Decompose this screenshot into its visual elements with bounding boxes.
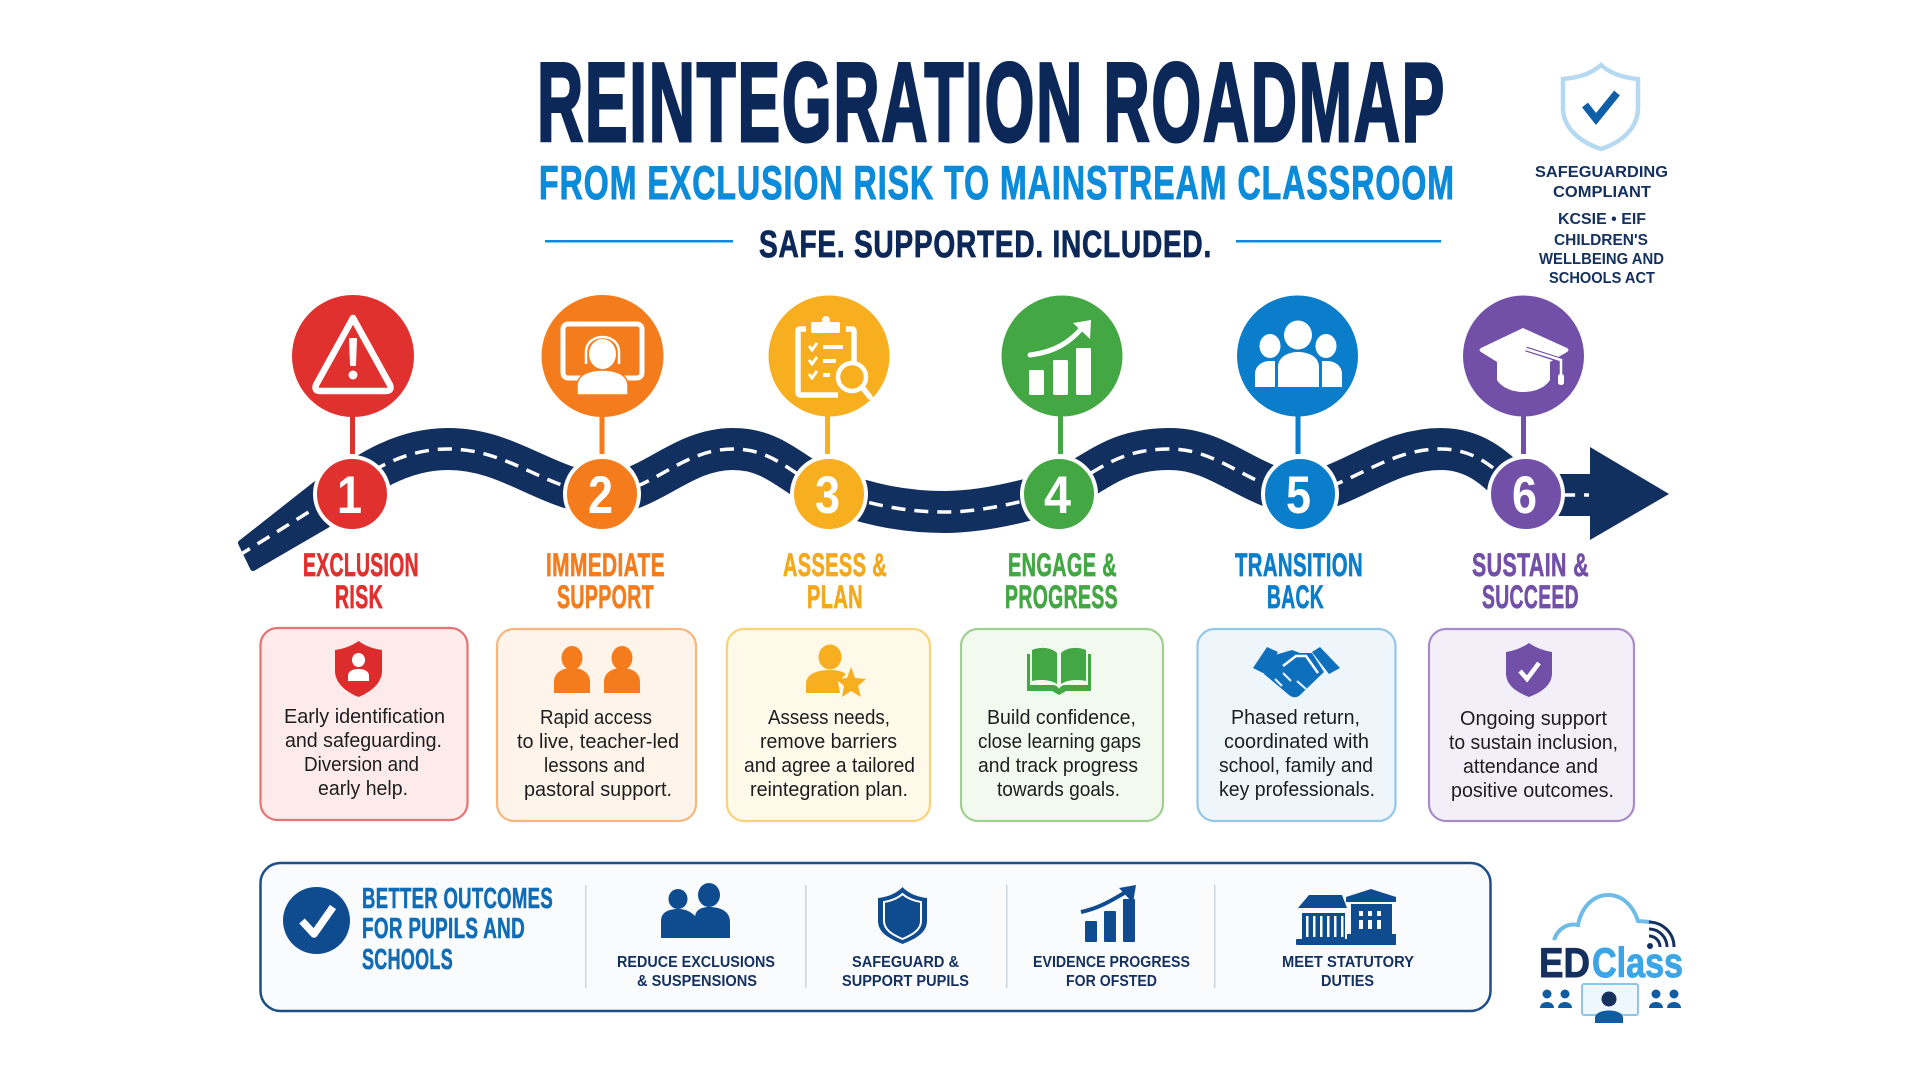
benefit: evidence progress	[1033, 885, 1190, 990]
number 6: 6	[1512, 466, 1537, 525]
card text: pastoral support.	[524, 778, 672, 801]
card text	[517, 706, 679, 801]
card text: Ongoing support	[1460, 707, 1607, 730]
heading: better outcomes	[362, 883, 553, 976]
icon: rising bar chart	[1002, 296, 1122, 416]
card box	[961, 629, 1163, 821]
card text: reintegration plan.	[750, 778, 908, 801]
panel: card 2 rapid access	[497, 629, 696, 821]
safeguarding compliant badge	[1535, 65, 1668, 287]
benefit label: FOR OFSTED	[1066, 973, 1157, 990]
icon: shield check	[1563, 65, 1638, 149]
card text: and safeguarding.	[285, 729, 442, 752]
card text: to sustain inclusion,	[1449, 731, 1618, 754]
step label: PROGRESS	[1005, 579, 1118, 615]
badge text: KCSIE • EIF	[1558, 211, 1646, 228]
benefit label: & SUSPENSIONS	[637, 973, 757, 990]
step 1: exclusion risk	[292, 295, 419, 615]
card text: key professionals.	[1219, 778, 1375, 801]
panel: card 1 early identification	[260, 628, 468, 820]
number 4	[1022, 457, 1096, 531]
heading: better outcomes: BETTER OUTCOMES	[362, 883, 553, 915]
card text: early help.	[318, 777, 408, 800]
panel: card 6 ongoing support	[1429, 629, 1634, 821]
benefit label	[1033, 954, 1190, 990]
card text	[978, 706, 1141, 801]
card box	[497, 629, 696, 821]
stem	[1521, 416, 1526, 454]
icon: progress chart	[1081, 885, 1136, 942]
card text	[744, 706, 915, 801]
step label	[546, 547, 665, 615]
icon: check circle	[283, 887, 350, 954]
benefit label: DUTIES	[1321, 973, 1374, 990]
badge text	[1535, 164, 1668, 287]
icon: institution buildings	[1296, 889, 1396, 945]
step label: BACK	[1267, 579, 1324, 615]
icon: open book	[1027, 648, 1091, 695]
card text: towards goals.	[997, 778, 1120, 801]
panel: card 3 assess needs	[727, 629, 930, 821]
number 2	[565, 457, 639, 531]
card text: and agree a tailored	[744, 754, 915, 777]
tagline with rules: SAFE. SUPPORTED. INCLUDED.	[759, 224, 1212, 266]
step label: PLAN	[807, 579, 863, 615]
stem	[350, 416, 355, 454]
card text: close learning gaps	[978, 730, 1141, 753]
step 3: assess and plan	[768, 296, 890, 615]
card text	[284, 705, 445, 800]
icon: pupils	[661, 883, 730, 938]
number 2: 2	[588, 466, 613, 525]
icon: clipboard and magnifier	[768, 296, 890, 416]
step 2: immediate support	[542, 295, 665, 615]
icon: warning triangle	[292, 295, 414, 417]
step label	[1235, 547, 1363, 615]
number 5: 5	[1286, 466, 1311, 525]
stem	[600, 416, 604, 454]
number 1: 1	[337, 466, 362, 525]
icon: person with star	[806, 644, 866, 697]
benefit label: SUPPORT PUPILS	[842, 973, 969, 990]
step label: TRANSITION	[1235, 547, 1363, 583]
step 4: engage and progress	[1002, 296, 1122, 615]
stem	[825, 416, 830, 454]
card text	[1449, 707, 1618, 802]
panel: card 5 phased return	[1198, 629, 1396, 821]
benefit label: SAFEGUARD &	[852, 954, 959, 971]
card text: Diversion and	[304, 753, 419, 776]
benefit label: MEET STATUTORY	[1282, 954, 1414, 971]
bar background	[260, 863, 1490, 1011]
step 6: sustain and succeed	[1463, 296, 1589, 615]
number 1	[315, 457, 389, 531]
badge text: WELLBEING AND	[1539, 251, 1664, 268]
card text: Assess needs,	[768, 706, 890, 729]
step label	[783, 547, 887, 615]
icon: handshake	[1253, 647, 1340, 697]
card text: to live, teacher-led	[517, 730, 679, 753]
step label: ENGAGE &	[1008, 547, 1117, 583]
card text: Early identification	[284, 705, 445, 728]
card box	[1429, 629, 1634, 821]
badge text: CHILDREN'S	[1554, 232, 1648, 249]
card text	[1219, 706, 1375, 801]
card text: coordinated with	[1224, 730, 1369, 753]
card text: school, family and	[1219, 754, 1373, 777]
number 3	[792, 457, 866, 531]
number 5	[1263, 457, 1337, 531]
card box	[727, 629, 930, 821]
step label	[1472, 547, 1589, 615]
panel: card 4 build confidence	[961, 629, 1163, 821]
card text: Build confidence,	[987, 706, 1136, 729]
number 4: 4	[1044, 466, 1071, 525]
logo wordmark	[1539, 939, 1683, 986]
road with arrow	[238, 447, 1669, 568]
step label: ASSESS &	[783, 547, 887, 583]
icon: shield with person	[335, 641, 382, 697]
benefit: meet statutory duties	[1282, 889, 1414, 990]
icon: pupils and online teacher	[1540, 984, 1681, 1023]
card text: attendance and	[1463, 755, 1598, 778]
card text: Phased return,	[1231, 706, 1360, 729]
icon: cloud	[1554, 895, 1650, 940]
benefit: safeguard and support	[842, 887, 969, 990]
card text: Rapid access	[540, 706, 652, 729]
step label: SUSTAIN &	[1472, 547, 1589, 583]
logo wordmark: Class	[1592, 939, 1683, 986]
benefit: reduce exclusions	[617, 883, 775, 990]
stem	[1296, 416, 1300, 454]
stem	[1058, 416, 1063, 454]
step label: IMMEDIATE	[546, 547, 665, 583]
step label	[1005, 547, 1118, 615]
panel: better outcomes bar	[260, 863, 1490, 1011]
benefit label: REDUCE EXCLUSIONS	[617, 954, 775, 971]
badge text: SAFEGUARDING	[1535, 164, 1668, 181]
number 3: 3	[815, 466, 840, 525]
benefit label	[617, 954, 775, 990]
card text: remove barriers	[760, 730, 897, 753]
benefit label	[842, 954, 969, 990]
badge text: SCHOOLS ACT	[1549, 270, 1655, 287]
heading: better outcomes: SCHOOLS	[362, 944, 453, 976]
logo: EDClass	[1539, 895, 1683, 1023]
icon: shield with check	[1506, 643, 1552, 697]
icon: group of people	[1237, 296, 1358, 416]
logo wordmark: ED	[1539, 939, 1590, 986]
icon: two people	[554, 646, 640, 693]
step label	[303, 547, 419, 615]
card text: positive outcomes.	[1451, 779, 1614, 802]
step label: RISK	[335, 579, 383, 615]
step label: SUCCEED	[1482, 579, 1579, 615]
card box	[1198, 629, 1396, 821]
badge text: COMPLIANT	[1553, 184, 1651, 201]
number 6	[1489, 457, 1563, 531]
icon: shield	[878, 887, 927, 944]
benefit label: EVIDENCE PROGRESS	[1033, 954, 1190, 971]
card text: lessons and	[544, 754, 645, 777]
icon: graduation cap	[1463, 296, 1584, 416]
icon: online teacher on screen	[542, 295, 664, 417]
benefit label	[1282, 954, 1414, 990]
heading: better outcomes: FOR PUPILS AND	[362, 913, 525, 945]
step label: EXCLUSION	[303, 547, 419, 583]
card text: and track progress	[978, 754, 1138, 777]
card box	[260, 628, 468, 820]
icon: wifi signal	[1648, 922, 1674, 948]
step label: SUPPORT	[557, 579, 654, 615]
subtitle: FROM EXCLUSION RISK TO MAINSTREAM CLASSROOM	[539, 156, 1455, 209]
step 5: transition back	[1235, 296, 1363, 615]
